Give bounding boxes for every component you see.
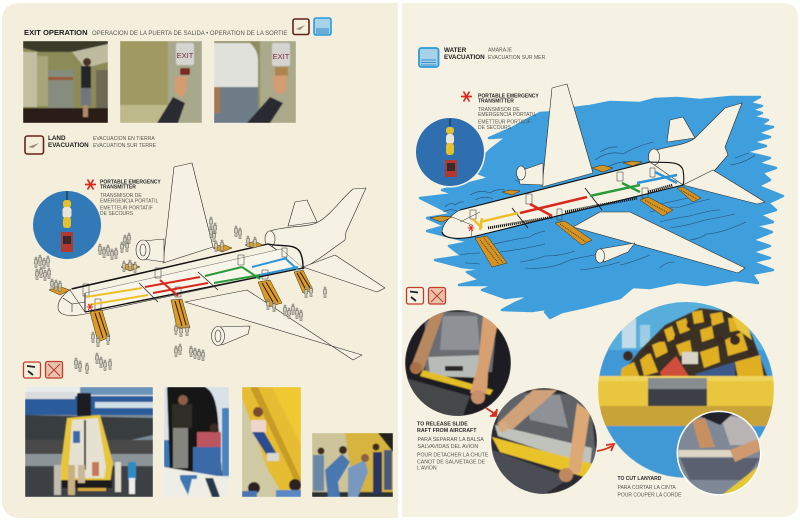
photo: helpers at foot of slide — [312, 433, 393, 497]
icon: land evacuation badge — [25, 136, 44, 154]
heading: land evacuation: EVACUATION — [48, 142, 89, 149]
tail and stabilisers — [648, 103, 765, 204]
near wing — [185, 290, 362, 360]
photo inset: cutting the lanyard — [676, 410, 762, 496]
asterisk — [461, 92, 472, 102]
photo: cabin door with attendant — [23, 41, 108, 123]
text: to cut lanyard: TO CUT LANYARD — [618, 476, 662, 482]
icon: slide warning — [24, 362, 40, 378]
text: to cut lanyard — [618, 476, 682, 498]
near wing — [573, 212, 745, 273]
heading: land evacuation: LAND — [48, 135, 66, 142]
rafts — [430, 161, 701, 267]
callout: portable emergency transmitter, water: TRANSMISOR DE — [478, 107, 520, 113]
text: to release slide raft: POUR DETACHER LA CHUTE — [417, 453, 489, 459]
diagram: land evacuation aircraft — [49, 163, 385, 360]
text: to cut lanyard: POUR COUPER LA CORDE — [618, 492, 682, 498]
heading: exit operation — [24, 28, 287, 37]
heading: land evacuation: EVACUACION EN TIERRA — [93, 136, 155, 142]
panel: right page — [402, 3, 798, 517]
heading: land evacuation: EVACUATION SUR TERRE — [93, 143, 157, 149]
callout: portable emergency transmitter, water — [414, 92, 539, 188]
heading: water evacuation — [444, 47, 546, 61]
fuselage — [58, 244, 303, 316]
slide lanes — [95, 272, 310, 338]
heading: water evacuation: AMARAJE — [488, 48, 513, 54]
icon: prohibited raft — [428, 288, 446, 304]
aisle: blue — [252, 258, 298, 275]
photo: hand on exit handle, closed door — [120, 41, 202, 123]
text: to release slide raft: CANOT DE SAUVETAGE DE — [417, 460, 486, 466]
text: to cut lanyard: PARA CORTAR LA CINTA — [618, 485, 676, 491]
callout: portable emergency transmitter, land: PORTABLE EMERGENCY — [100, 180, 161, 186]
far wing — [163, 163, 213, 263]
photo: releasing slide raft, step 2 — [490, 388, 597, 497]
raft texture — [480, 190, 697, 264]
aisle: yellow — [86, 288, 148, 305]
aisle arrows — [473, 172, 677, 230]
text: to release slide raft: SALVAVIDAS DEL AVION — [418, 444, 478, 450]
window row — [488, 185, 673, 228]
photo: releasing slide raft, step 1 — [405, 310, 511, 418]
aisle: red — [145, 277, 208, 296]
near engine — [596, 243, 635, 263]
text: to release slide raft: L'AVION — [417, 466, 437, 472]
diagram: water evacuation aircraft — [430, 84, 765, 273]
callout: portable emergency transmitter, water: PORTABLE EMERGENCY — [478, 94, 539, 100]
transmitter unit — [445, 119, 457, 177]
text: to release slide raft: PARA SEPARAR LA BALSA — [418, 437, 484, 443]
callout: portable emergency transmitter, land: EMETTEUR PORTATIF — [100, 206, 153, 212]
icon: water evacuation badge — [419, 48, 438, 67]
chart: sea — [420, 97, 783, 318]
photo: hand on exit handle, open door — [214, 41, 296, 123]
near engine — [212, 326, 250, 346]
rear stabiliser and fin — [265, 188, 385, 292]
fuselage — [442, 162, 684, 238]
icon: land evacuation — [293, 19, 309, 34]
arrow: step 1 to step 2 — [486, 408, 497, 416]
slides — [49, 241, 313, 342]
text: to release slide raft: TO RELEASE SLIDE — [417, 422, 468, 428]
heading: water evacuation: EVACUATION — [444, 54, 485, 61]
heading: exit operation: EXIT OPERATION — [24, 28, 88, 37]
transmitter unit — [61, 191, 73, 252]
callout: portable emergency transmitter, water: DE SECOURS — [478, 125, 512, 131]
callout: portable emergency transmitter, water: TRANSMITTER — [478, 98, 514, 104]
callout: portable emergency transmitter, land: TRANSMITTER — [100, 184, 136, 190]
aisle: green — [205, 267, 260, 283]
text: to release slide raft — [417, 422, 489, 472]
photo: woman on slide — [242, 387, 301, 497]
asterisk — [85, 180, 96, 190]
far wing — [542, 84, 593, 187]
waves — [443, 142, 755, 270]
icon: prohibited raft — [46, 362, 62, 378]
callout: portable emergency transmitter, water: EMERGENCIA PORTATIL — [478, 112, 537, 118]
photo: slide deployed at aircraft — [25, 387, 153, 497]
heading: water evacuation: WATER — [444, 47, 467, 54]
callout: portable emergency transmitter, land: DE SECOURS — [100, 211, 134, 217]
photo: hand on exit handle, closed door: EXIT — [177, 51, 194, 60]
arrow: step 2 to raft — [597, 444, 614, 451]
far engine — [136, 239, 164, 262]
callout: portable emergency transmitter, land — [33, 180, 161, 259]
callout: portable emergency transmitter, water: EMETTEUR PORTATIF — [478, 120, 531, 126]
photo: hand on exit handle, open door: EXIT — [273, 52, 290, 61]
photo: passengers at door sill — [164, 387, 229, 497]
heading: land evacuation — [48, 135, 157, 149]
transmitter marker — [87, 304, 93, 310]
icon: water evacuation — [314, 18, 331, 35]
photo: passengers in inflated raft — [598, 300, 774, 478]
callout: portable emergency transmitter, land: TRANSMISOR DE — [100, 193, 142, 199]
people: evacuees on land — [34, 217, 327, 374]
far engine — [516, 163, 543, 185]
panel: left page — [2, 3, 398, 518]
text: to release slide raft: RAFT FROM AIRCRAFT — [417, 428, 477, 434]
callout: portable emergency transmitter, land: EMERGENCIA PORTATIL — [100, 198, 159, 204]
icon: slide warning — [406, 288, 424, 304]
heading: exit operation: OPERACION DE LA PUERTA DE SALIDA • OPERATION DE LA SORTIE — [92, 31, 287, 37]
heading: water evacuation: EVACUATION SUR MER — [488, 55, 546, 61]
